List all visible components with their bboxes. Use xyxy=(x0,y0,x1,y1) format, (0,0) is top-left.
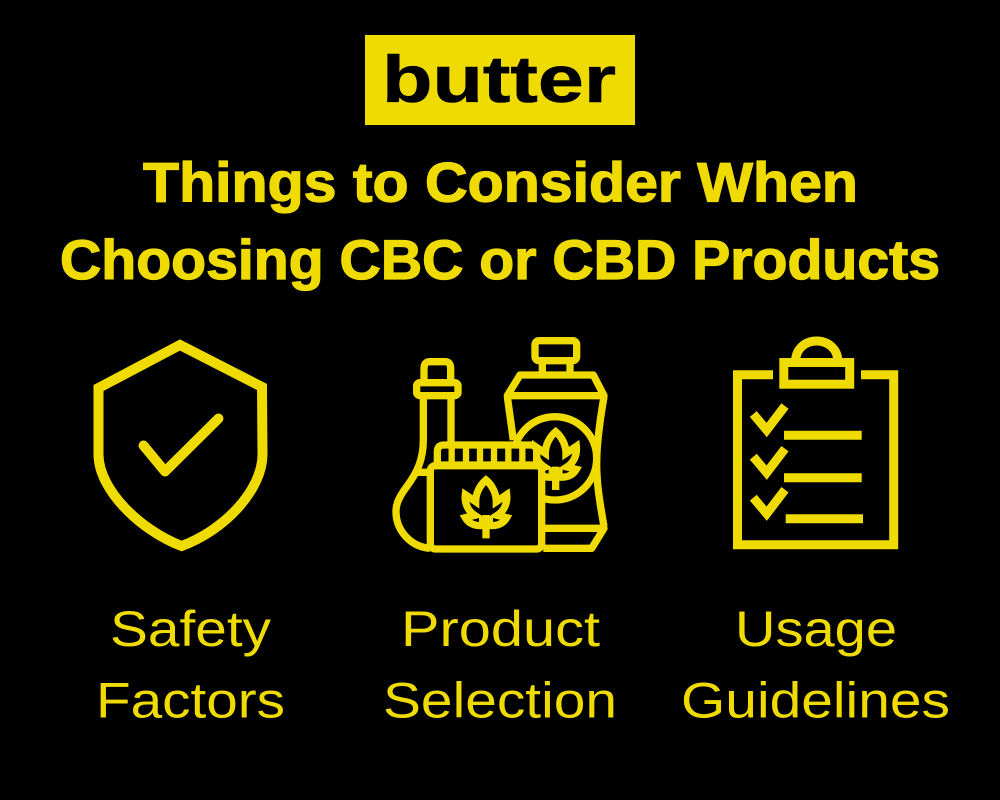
icon: clipboard checklist xyxy=(738,341,894,545)
icon: shield with check mark xyxy=(98,345,262,546)
jar xyxy=(430,445,542,549)
label: Product Selection: Selection xyxy=(383,672,617,728)
large bottle xyxy=(507,341,604,548)
label: Usage Guidelines: Usage xyxy=(735,601,897,657)
label: Usage Guidelines: Guidelines xyxy=(681,672,950,728)
logo: butter: butter xyxy=(382,42,616,116)
logo: butter xyxy=(365,35,635,125)
label: Usage Guidelines xyxy=(681,601,950,728)
title: Choosing CBC or CBD Products xyxy=(60,228,940,291)
title: Things to Consider When xyxy=(143,151,858,214)
label: Safety Factors xyxy=(96,601,285,728)
label: Product Selection xyxy=(383,601,617,728)
label: Safety Factors: Factors xyxy=(96,672,285,728)
icon: cannabis products xyxy=(396,341,604,549)
title xyxy=(60,151,940,291)
small bottle xyxy=(396,362,458,548)
label: Safety Factors: Safety xyxy=(110,601,271,657)
label: Product Selection: Product xyxy=(401,601,600,657)
